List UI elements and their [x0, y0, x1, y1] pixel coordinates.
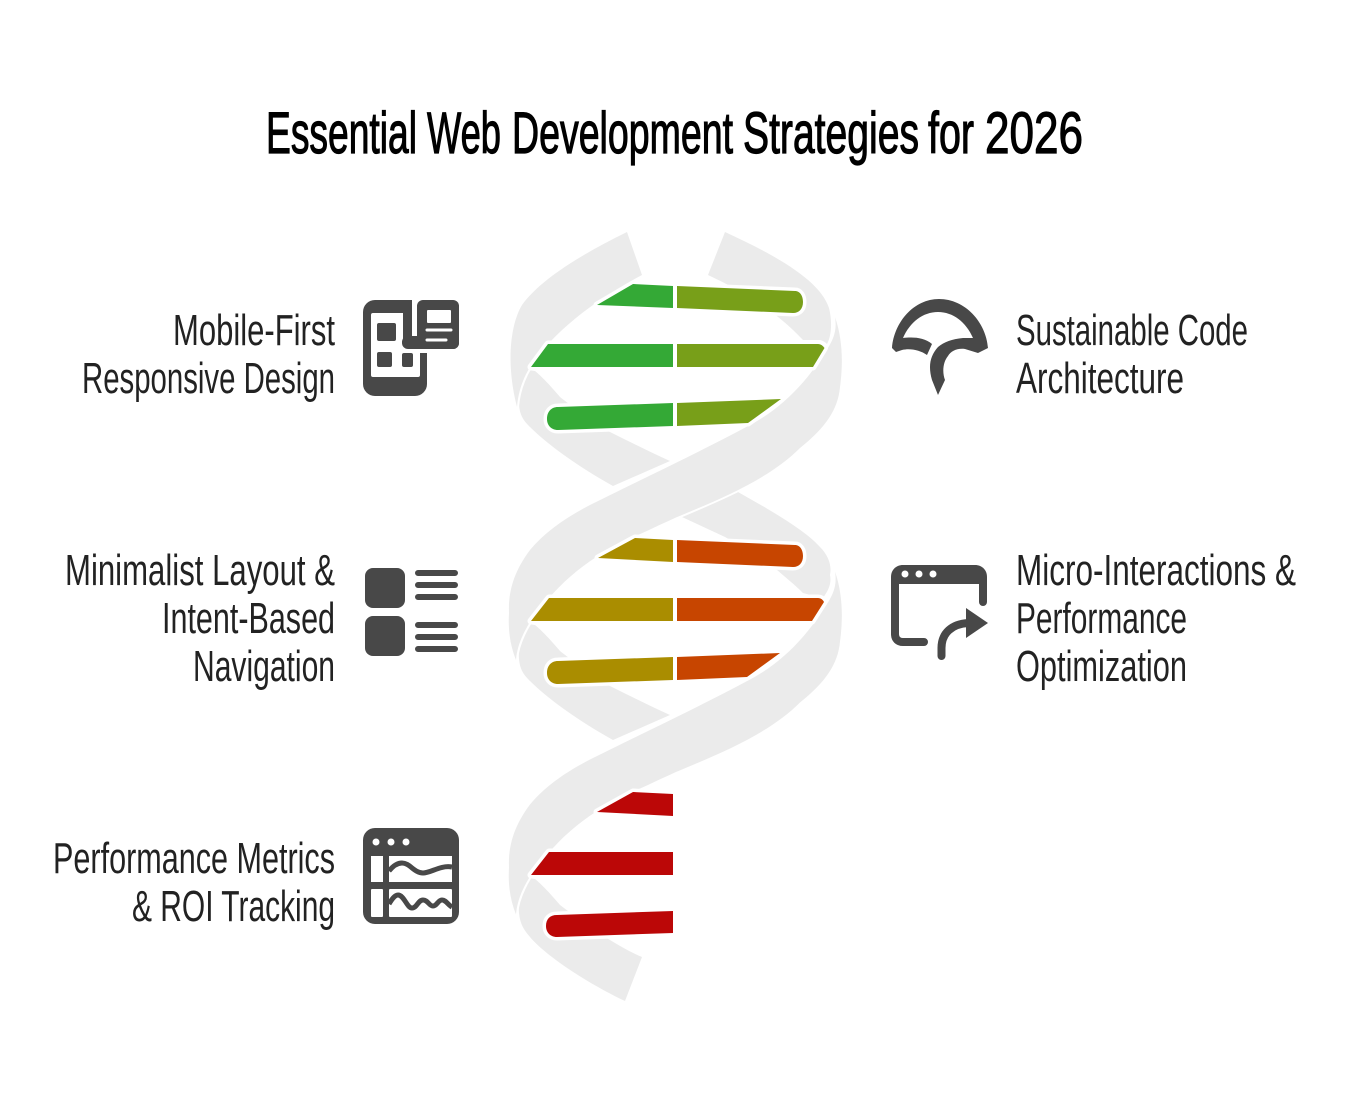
ribbon: second inner left strand	[519, 624, 670, 740]
label: Mobile-First Responsive Design: Mobile-First	[173, 306, 335, 355]
label: Performance Metrics & ROI Tracking: & ROI Tracking	[132, 882, 335, 931]
ribbon: second crossing strand	[509, 572, 842, 914]
ribbon: first inner left strand	[519, 370, 670, 486]
label: Micro-Interactions & Performance Optimization	[1016, 546, 1296, 691]
panel: Mobile-First Responsive Design	[82, 296, 464, 403]
label: Minimalist Layout & Intent-Based Navigation	[65, 546, 335, 691]
icon: browser window with arrow	[891, 565, 988, 656]
DNA helix backbone	[509, 232, 842, 1001]
panel: Minimalist Layout & Intent-Based Navigation	[65, 546, 455, 691]
ribbon: second right strand	[682, 492, 831, 598]
title: 2026	[985, 101, 1083, 166]
label: Performance Metrics & ROI Tracking: Performance Metrics	[53, 834, 335, 883]
title: Strategies	[743, 101, 919, 166]
label: Minimalist Layout & Intent-Based Navigation: Navigation	[193, 642, 335, 691]
label: Sustainable Code Architecture	[1016, 306, 1248, 403]
rungs: red, bottom left	[531, 792, 673, 937]
label: Sustainable Code Architecture: Sustainable Code	[1016, 306, 1248, 355]
rungs: olive, top right	[677, 286, 824, 426]
title: Web	[427, 101, 501, 166]
ribbon: first crossing strand	[509, 317, 842, 660]
icon: phone with card	[363, 296, 464, 396]
ribbon: bottom left strand	[519, 878, 642, 1001]
icon: analytics window	[363, 828, 459, 924]
rungs: orange, middle right	[677, 540, 824, 680]
ribbon: top right strand	[708, 232, 831, 344]
ribbon: top left strand	[511, 232, 642, 407]
label: Micro-Interactions & Performance Optimization: Optimization	[1016, 642, 1187, 691]
title: for	[928, 101, 974, 166]
title: Development	[512, 101, 733, 166]
label: Sustainable Code Architecture: Architecture	[1016, 354, 1184, 403]
icon: umbrella	[892, 299, 988, 395]
label: Performance Metrics & ROI Tracking	[53, 834, 335, 931]
label: Mobile-First Responsive Design: Responsive Design	[82, 354, 335, 403]
rungs: dark yellow, middle left	[531, 538, 673, 684]
label: Minimalist Layout & Intent-Based Navigation: Minimalist Layout &	[65, 546, 335, 595]
title: Essential	[266, 101, 417, 166]
label: Micro-Interactions & Performance Optimization: Performance	[1016, 594, 1187, 643]
rungs: green, top left	[531, 284, 673, 430]
label: Mobile-First Responsive Design	[82, 306, 335, 403]
panel: Micro-Interactions & Performance Optimization	[891, 546, 1296, 691]
panel: Performance Metrics & ROI Tracking	[53, 828, 459, 931]
title	[266, 101, 1083, 166]
icon: list layout	[365, 568, 455, 656]
panel: Sustainable Code Architecture	[892, 299, 1248, 403]
label: Minimalist Layout & Intent-Based Navigation: Intent-Based	[162, 594, 335, 643]
